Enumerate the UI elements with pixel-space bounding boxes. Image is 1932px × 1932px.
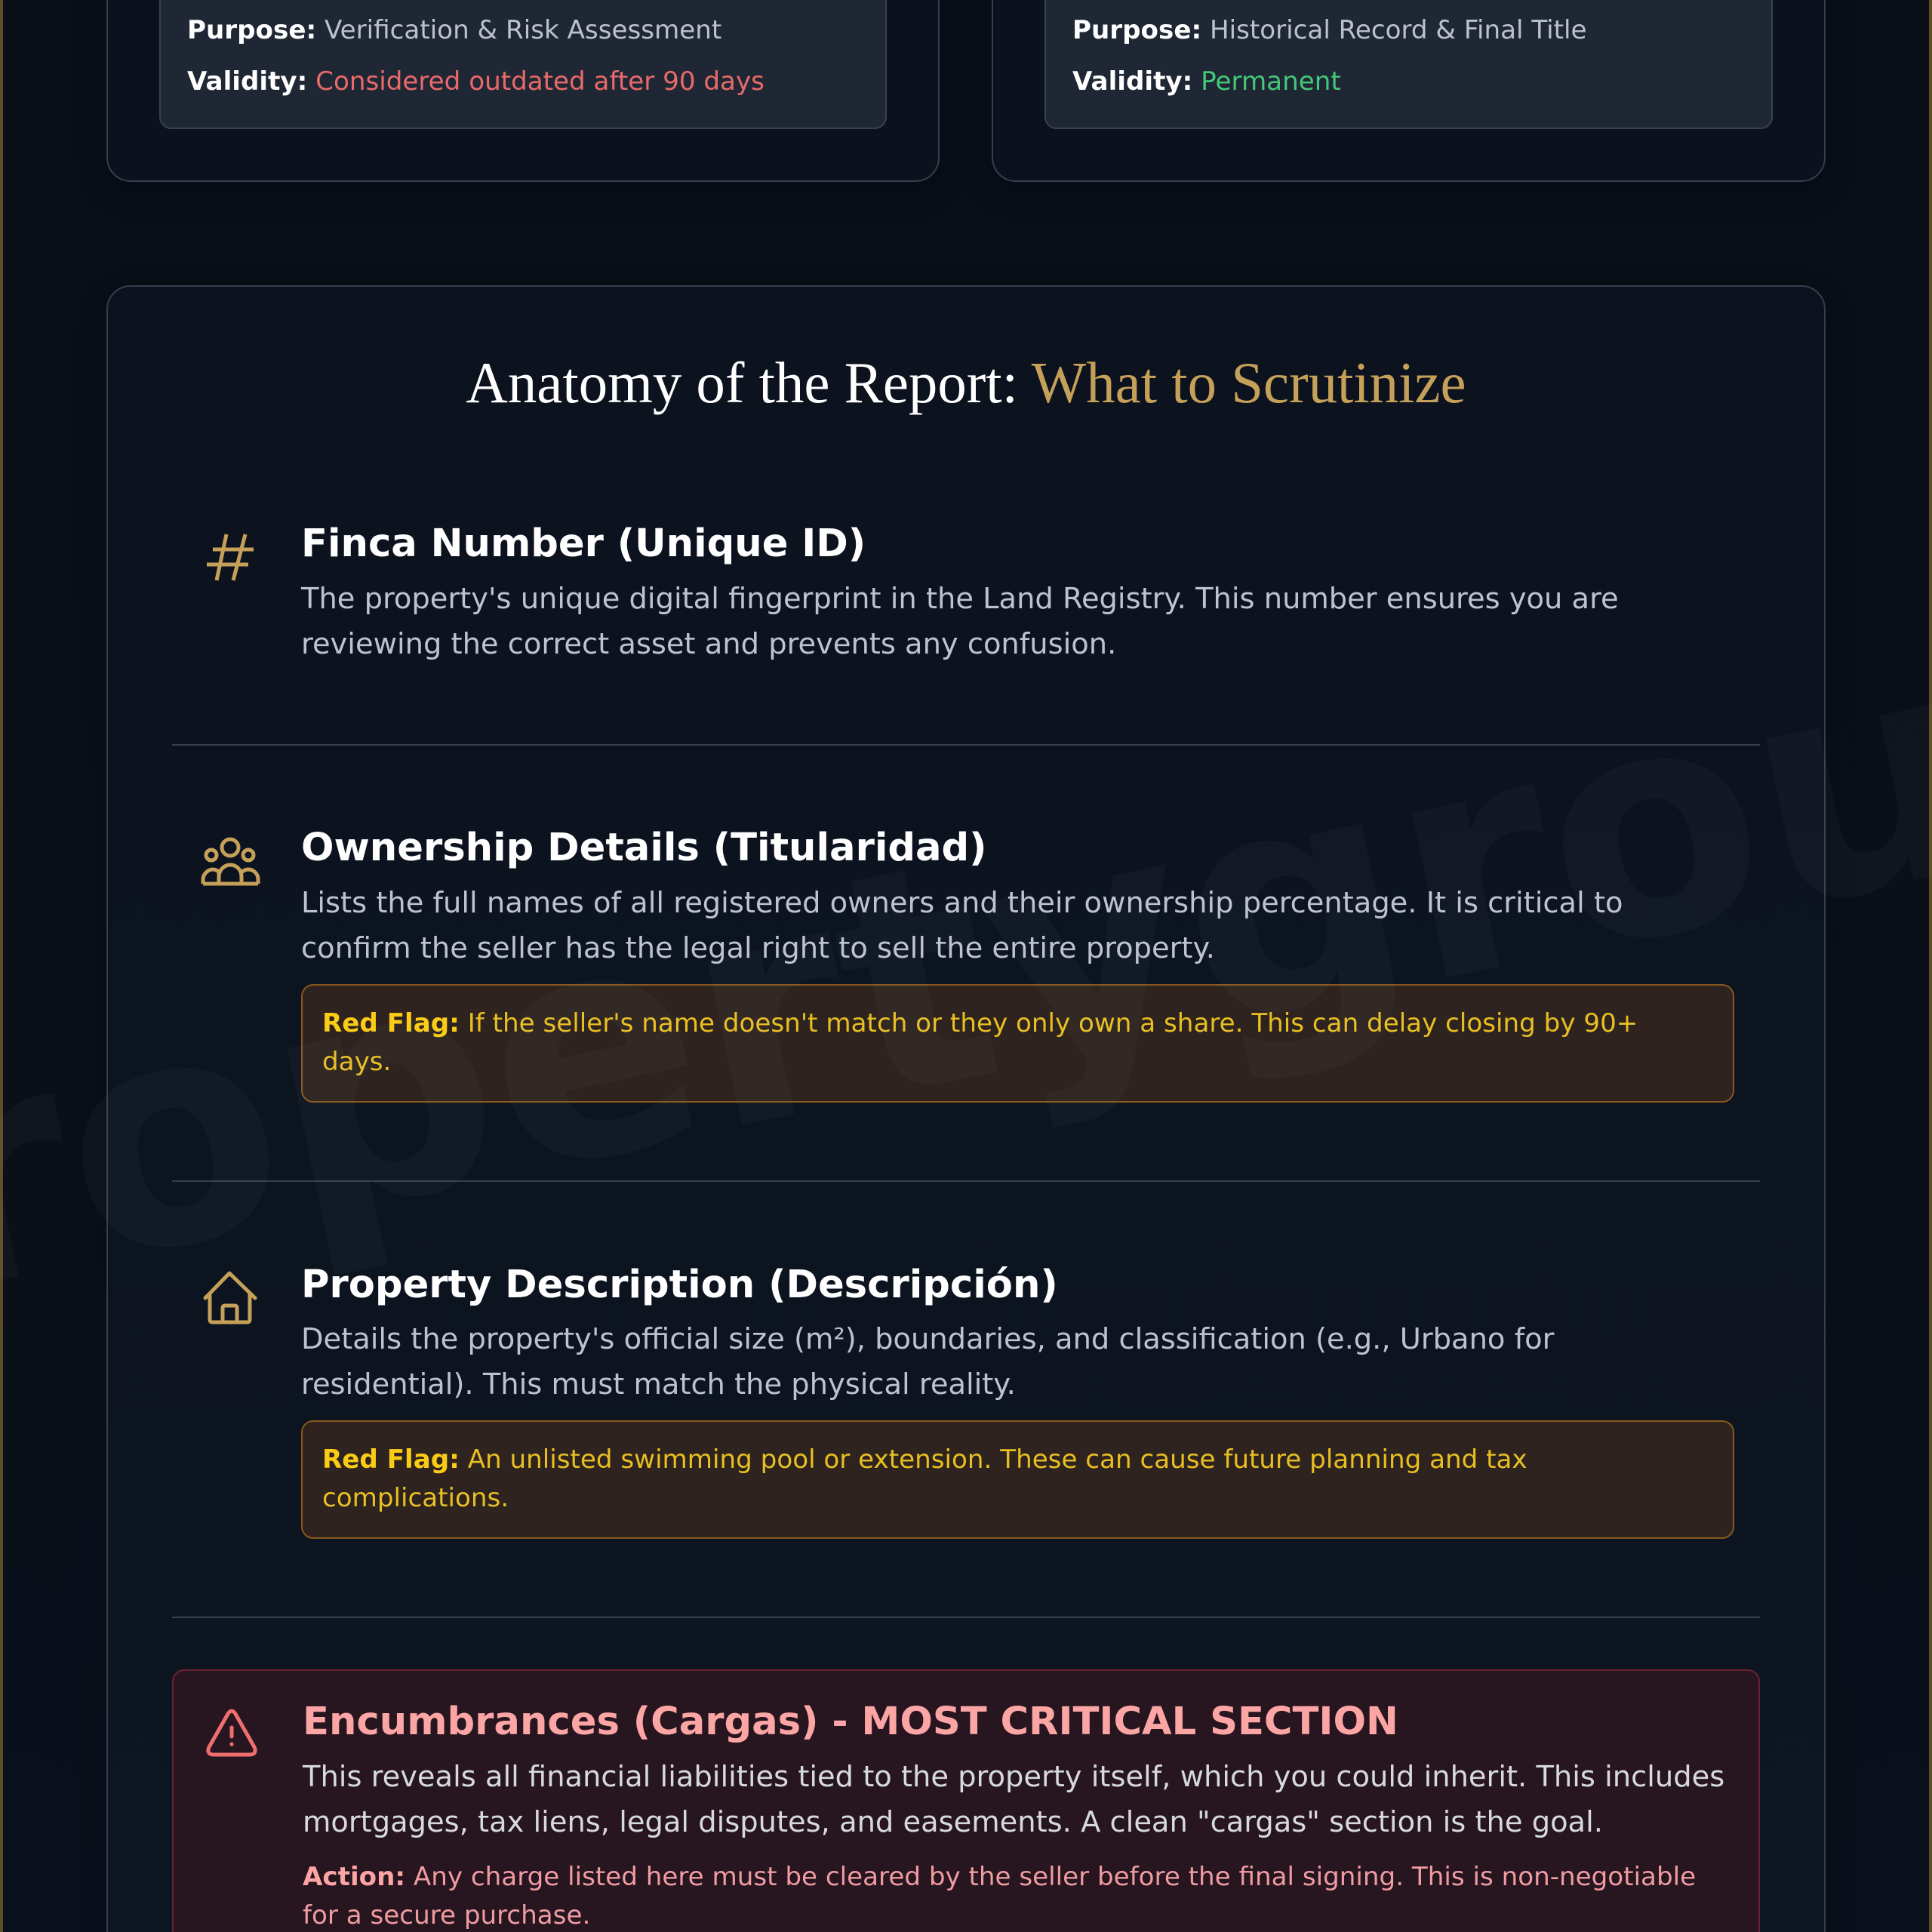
heading: property description: Property Description (Descripción) [301, 1262, 1058, 1307]
text: property description body: residential). This must match the physical reality. [301, 1367, 1016, 1401]
item: ownership details [301, 825, 1623, 965]
text: encumbrances action: for a secure purchase. [303, 1900, 590, 1930]
text: encumbrances description: mortgages, tax liens, legal disputes, and easements. A clean "cargas" section is the goal. [303, 1805, 1603, 1839]
text: finca description: The property's unique digital fingerprint in the Land Registry. This number ensures you are [301, 582, 1619, 616]
callout: property red flag: Red Flag: An unlisted swimming pool or extension. These can cause future planning and tax [322, 1444, 1527, 1475]
text: ownership description: Lists the full names of all registered owners and their ownership percentage. It is critical to [301, 886, 1623, 920]
text: validity left: Validity: Considered outdated after 90 days [187, 66, 764, 97]
callout: property red flag: complications. [322, 1483, 509, 1513]
panel: deed details [1044, 0, 1773, 129]
heading: encumbrances: Encumbrances (Cargas) - MOST CRITICAL SECTION [303, 1699, 1398, 1744]
panel: title deed [992, 0, 1826, 182]
panel: report details [159, 0, 887, 129]
left gold edge [0, 0, 3, 1932]
text: finca description [300, 582, 1619, 661]
text: encumbrances action: Action: Any charge listed here must be cleared by the seller before the final signing. This is non-negotiable [303, 1862, 1696, 1892]
text: purpose right: Purpose: Historical Record & Final Title [1072, 15, 1586, 45]
text: finca description: reviewing the correct asset and prevents any confusion. [301, 627, 1116, 661]
text: purpose left: Purpose: Verification & Risk Assessment [187, 15, 721, 45]
callout: ownership red flag: days. [322, 1047, 391, 1077]
text: ownership description [301, 886, 1623, 965]
heading: ownership details: Ownership Details (Titularidad) [301, 825, 987, 870]
text: encumbrances action [303, 1862, 1696, 1930]
callout: ownership red flag [301, 984, 1734, 1103]
heading: anatomy of the report: Anatomy of the Report: What to Scrutinize [466, 351, 1466, 415]
item: property description [301, 1262, 1555, 1401]
text: encumbrances description: This reveals all financial liabilities tied to the property itself, which you could inherit. This includes [303, 1760, 1724, 1794]
right gold edge [1929, 0, 1932, 1932]
panel: anatomy of the report [106, 285, 1826, 1932]
callout: ownership red flag: Red Flag: If the seller's name doesn't match or they only own a share. This can delay closing by 90+ [322, 1008, 1638, 1038]
text: encumbrances description [302, 1760, 1724, 1839]
text: ownership description: confirm the seller has the legal right to sell the entire property. [301, 931, 1215, 965]
text: validity right: Validity: Permanent [1072, 66, 1341, 97]
text: property description body: Details the property's official size (m²), boundaries, and classification (e.g., Urbano for [301, 1322, 1554, 1356]
item: finca number [300, 521, 1619, 661]
callout: property red flag [301, 1420, 1734, 1539]
panel: online land registry report [106, 0, 940, 182]
text: property description body [301, 1322, 1555, 1401]
heading: finca number: Finca Number (Unique ID) [301, 521, 866, 566]
panel: encumbrances [172, 1669, 1760, 1932]
